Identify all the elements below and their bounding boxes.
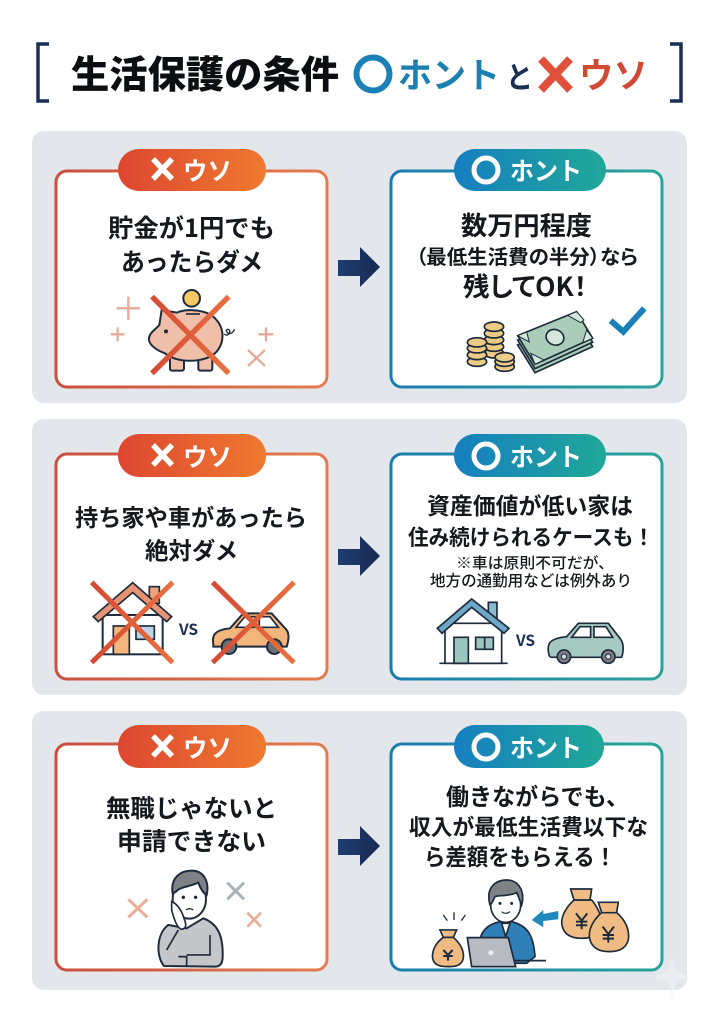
- fact note: [430, 552, 632, 591]
- fact text: ら差額をもらえる！: [424, 838, 616, 872]
- icon: crossed piggy bank: [111, 290, 273, 373]
- arrow: [338, 247, 380, 287]
- fact badge: [454, 725, 604, 768]
- myth text: 申請できない: [117, 823, 266, 858]
- fact text: [416, 206, 638, 304]
- card: working fact: [391, 725, 662, 970]
- fact badge: ホント: [510, 729, 582, 765]
- myth badge: [118, 725, 266, 768]
- myth badge: [118, 434, 266, 477]
- arrow: [338, 826, 380, 866]
- myth badge: [118, 149, 266, 191]
- fact badge: [454, 149, 606, 191]
- card: savings fact: [391, 149, 662, 387]
- myth text: あったらダメ: [121, 243, 263, 279]
- fact note: ※車は原則不可だが、: [456, 552, 614, 573]
- arrow: [338, 536, 380, 576]
- myth text: 無職じゃないと: [106, 790, 277, 825]
- title to: と: [506, 53, 533, 97]
- myth text: 持ち家や車があったら: [75, 499, 307, 533]
- fact badge: ホント: [510, 438, 582, 474]
- card: working myth: [56, 725, 327, 970]
- myth text: [75, 499, 307, 566]
- myth text: 貯金が1円でも: [108, 209, 275, 245]
- title right bracket: [670, 44, 681, 101]
- fact text: 住み続けられるケースも！: [408, 521, 654, 552]
- icon: coins and bills: [467, 308, 644, 373]
- card: house myth: [56, 434, 327, 679]
- icon: car: [548, 623, 623, 663]
- icon: crossed house: [92, 582, 173, 663]
- myth text: [106, 790, 277, 858]
- fact text: 収入が最低生活費以下な: [409, 810, 648, 842]
- vs label: VS: [515, 629, 535, 651]
- myth badge: ウソ: [183, 729, 232, 765]
- title left bracket: [38, 44, 49, 101]
- sparkle watermark: [654, 956, 690, 998]
- fact badge: [454, 434, 606, 477]
- fact text: 働きながらでも、: [446, 778, 629, 812]
- icon: crossed car: [213, 582, 294, 663]
- title honto: ホント: [398, 48, 500, 99]
- title: [38, 44, 681, 101]
- title uso: ウソ: [579, 48, 648, 99]
- fact text: [409, 778, 648, 872]
- fact text: 資産価値が低い家は: [427, 487, 633, 521]
- myth text: [108, 209, 275, 279]
- fact text: （最低生活費の半分）なら: [416, 241, 638, 270]
- fact text: [408, 487, 654, 552]
- title cross icon: [541, 59, 570, 90]
- card: house fact: [391, 434, 662, 679]
- icon: house: [437, 599, 509, 663]
- title circle icon: [356, 58, 390, 90]
- panel: savings: [32, 131, 687, 403]
- vs label: VS: [178, 618, 198, 640]
- myth text: 絶対ダメ: [145, 532, 238, 566]
- card: savings myth: [56, 149, 327, 387]
- fact badge: ホント: [510, 152, 582, 188]
- fact text: 残してOK！: [463, 267, 587, 304]
- title main text: 生活保護の条件: [71, 44, 339, 99]
- icon: worker with money bags: [432, 880, 629, 967]
- icon: worried person: [128, 871, 261, 967]
- fact note: 地方の通勤用などは例外あり: [430, 569, 632, 591]
- panel: working: [32, 711, 687, 990]
- panel: house and car: [32, 419, 687, 695]
- myth badge: ウソ: [183, 438, 232, 474]
- myth badge: ウソ: [183, 152, 232, 188]
- fact text: 数万円程度: [461, 206, 592, 243]
